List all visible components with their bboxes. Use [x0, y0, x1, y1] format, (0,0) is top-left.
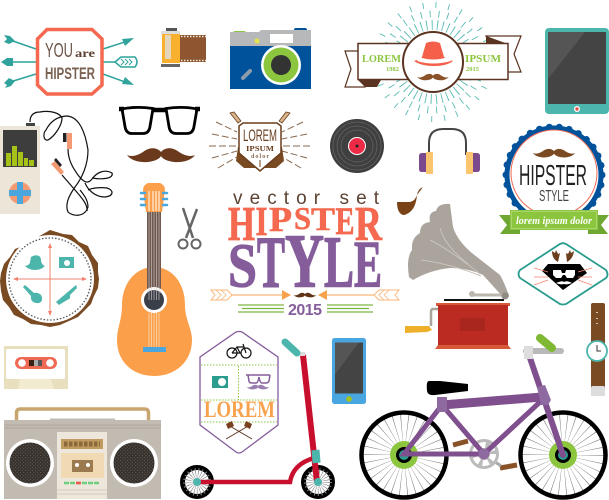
icon: mustache — [127, 148, 195, 162]
text: hipster: I — [256, 199, 268, 244]
title: vector set hipster style — [211, 188, 399, 319]
icon: film roll — [161, 28, 206, 67]
icon: mustache — [533, 149, 575, 157]
text: hipster: T — [311, 200, 335, 237]
icon: small camera — [212, 376, 228, 388]
icon: headphones — [419, 129, 480, 174]
text: style: L — [324, 221, 354, 303]
icon: guitar — [117, 183, 192, 376]
icons: hat, camera, guitar, watch — [25, 255, 45, 270]
arrows — [1, 35, 137, 88]
badge: hipster style — [499, 127, 609, 234]
badge: you are hipster: are — [75, 46, 96, 60]
badge: hat banner with sunburst: 2015 — [466, 66, 480, 73]
icon: boombox — [4, 409, 161, 499]
ribbon — [345, 51, 365, 87]
handlebar — [526, 348, 561, 354]
decorative green lines — [238, 305, 373, 312]
text: hipster: H — [228, 196, 255, 251]
icon: pipe — [397, 187, 423, 215]
text: style: E — [354, 227, 382, 301]
ribbon — [499, 215, 609, 234]
icon: small bicycle — [227, 344, 251, 358]
text: vector set: vector set — [233, 188, 380, 209]
text: dolor: dolor — [251, 154, 269, 160]
icon: hat — [414, 42, 453, 66]
icon: small glasses — [246, 375, 270, 383]
icon: gramophone — [405, 204, 511, 349]
text: style: T — [257, 221, 285, 303]
arrows and mustache — [211, 290, 399, 300]
emblem: lorem hexagon — [200, 332, 278, 453]
text: hipster: HIPSTER — [45, 64, 95, 83]
icon: cassette tape — [4, 346, 68, 389]
text: ipsum: IPSUM — [246, 144, 274, 153]
icon: vinyl record — [330, 119, 384, 173]
text: lorem: LOREM — [243, 126, 277, 145]
badge: hat banner with sunburst — [345, 5, 521, 119]
text: hipster: S — [294, 201, 311, 236]
badge: you are hipster — [1, 30, 137, 94]
icon: smartphone — [332, 338, 366, 404]
icon: scissors — [178, 208, 200, 248]
text: you are: YOU — [45, 40, 73, 62]
icon: scooter — [182, 342, 332, 496]
icon: glasses — [119, 107, 200, 134]
badge: hat banner with sunburst: 1982 — [386, 66, 399, 73]
text: style — [228, 219, 382, 303]
text: 2015: 2015 — [288, 302, 322, 319]
emblem: lorem ipsum dolor — [209, 112, 310, 171]
text: style: Y — [285, 219, 324, 303]
badge: hat banner with sunburst: IPSUM — [465, 53, 502, 65]
text: style: STYLE — [539, 188, 569, 205]
icon: wrist watch — [587, 303, 607, 396]
text: lorem ipsum: LOREM — [362, 53, 402, 65]
emblem: compass wheel — [0, 230, 99, 327]
text: style: S — [228, 232, 257, 301]
icon: bicycle — [362, 338, 606, 498]
sunburst rays — [376, 5, 490, 119]
saddle — [427, 381, 468, 395]
icon: tablet — [545, 28, 609, 114]
wheels — [362, 412, 606, 498]
icon: mp3 player and earphones — [0, 111, 112, 215]
frame — [404, 358, 563, 455]
emblem: bearded diamond — [518, 243, 608, 304]
text: lorem: LOREM — [204, 397, 275, 422]
text: hipster — [228, 196, 383, 251]
icon: camera — [230, 28, 311, 89]
text: hipster: E — [336, 199, 354, 243]
icon: mustache — [417, 74, 449, 80]
text: hipster: R — [355, 196, 383, 251]
text: lorem ipsum dolor: lorem ipsum dolor — [516, 215, 593, 227]
chainring and pedals — [453, 441, 468, 445]
icon: crossed axes — [226, 425, 252, 439]
text: hipster: P — [269, 201, 292, 239]
